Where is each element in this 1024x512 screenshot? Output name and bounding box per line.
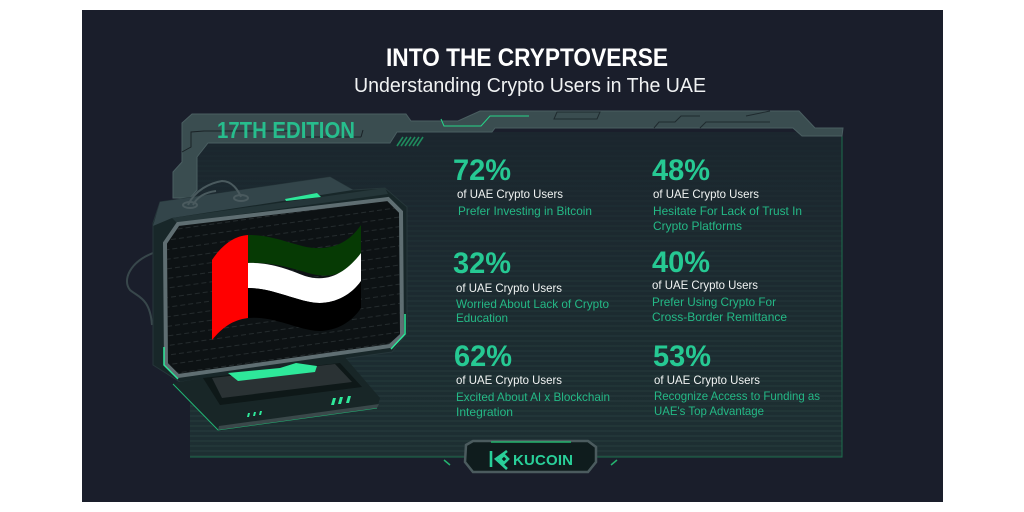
stat: 72%: [453, 154, 592, 218]
stat: 48%: [652, 154, 802, 233]
frame: top and left border: [173, 111, 843, 198]
logo badge: [444, 441, 617, 472]
subtitle: Understanding Crypto Users in The UAE: [354, 75, 706, 97]
stat: 72%: 72%: [453, 154, 511, 187]
stat: 62%: Excited About AI x Blockchain: [456, 390, 610, 404]
stat: 48%: 48%: [652, 154, 710, 187]
stat: 48%: of UAE Crypto Users: [653, 187, 759, 201]
stat: 32%: of UAE Crypto Users: [456, 281, 562, 295]
panel: stats background: [190, 132, 842, 457]
stat: 72%: of UAE Crypto Users: [457, 187, 563, 201]
stat: 53%: [653, 340, 820, 418]
logo wordmark: KUCOIN: [513, 452, 573, 469]
stat: 62%: of UAE Crypto Users: [456, 373, 562, 387]
icon: KuCoin mark: [491, 451, 508, 469]
stat: 40%: [652, 246, 787, 324]
stat: 32%: 32%: [453, 247, 511, 280]
stat: 40%: 40%: [652, 246, 710, 279]
stat: 53%: Recognize Access to Funding as: [654, 389, 820, 403]
stat: 32%: Worried About Lack of Crypto: [456, 297, 609, 311]
stat: 32%: [453, 247, 609, 325]
edition label: 17TH EDITION: [217, 117, 355, 143]
stat: 53%: UAE's Top Advantage: [654, 404, 764, 418]
stat: 53%: of UAE Crypto Users: [654, 373, 760, 387]
stat: 62%: 62%: [454, 340, 512, 373]
stat: 32%: Education: [456, 311, 508, 325]
stat: 40%: of UAE Crypto Users: [652, 278, 758, 292]
stat: 48%: Hesitate For Lack of Trust In: [653, 204, 802, 218]
monitor stand: [173, 355, 380, 431]
stat: 62%: Integration: [456, 405, 513, 419]
stat: 40%: Cross-Border Remittance: [652, 310, 787, 324]
stat: 72%: Prefer Investing in Bitcoin: [458, 204, 592, 218]
stat: 53%: 53%: [653, 340, 711, 373]
monitor body: [153, 177, 407, 382]
cable on left of monitor: [127, 253, 153, 325]
title: INTO THE CRYPTOVERSE: [386, 44, 668, 72]
monitor handle: [183, 181, 248, 208]
monitor screen: [164, 199, 405, 379]
stat: 40%: Prefer Using Crypto For: [652, 295, 776, 309]
stat: 48%: Crypto Platforms: [653, 219, 742, 233]
stat: 62%: [454, 340, 610, 419]
icon: UAE flag: [212, 225, 361, 340]
